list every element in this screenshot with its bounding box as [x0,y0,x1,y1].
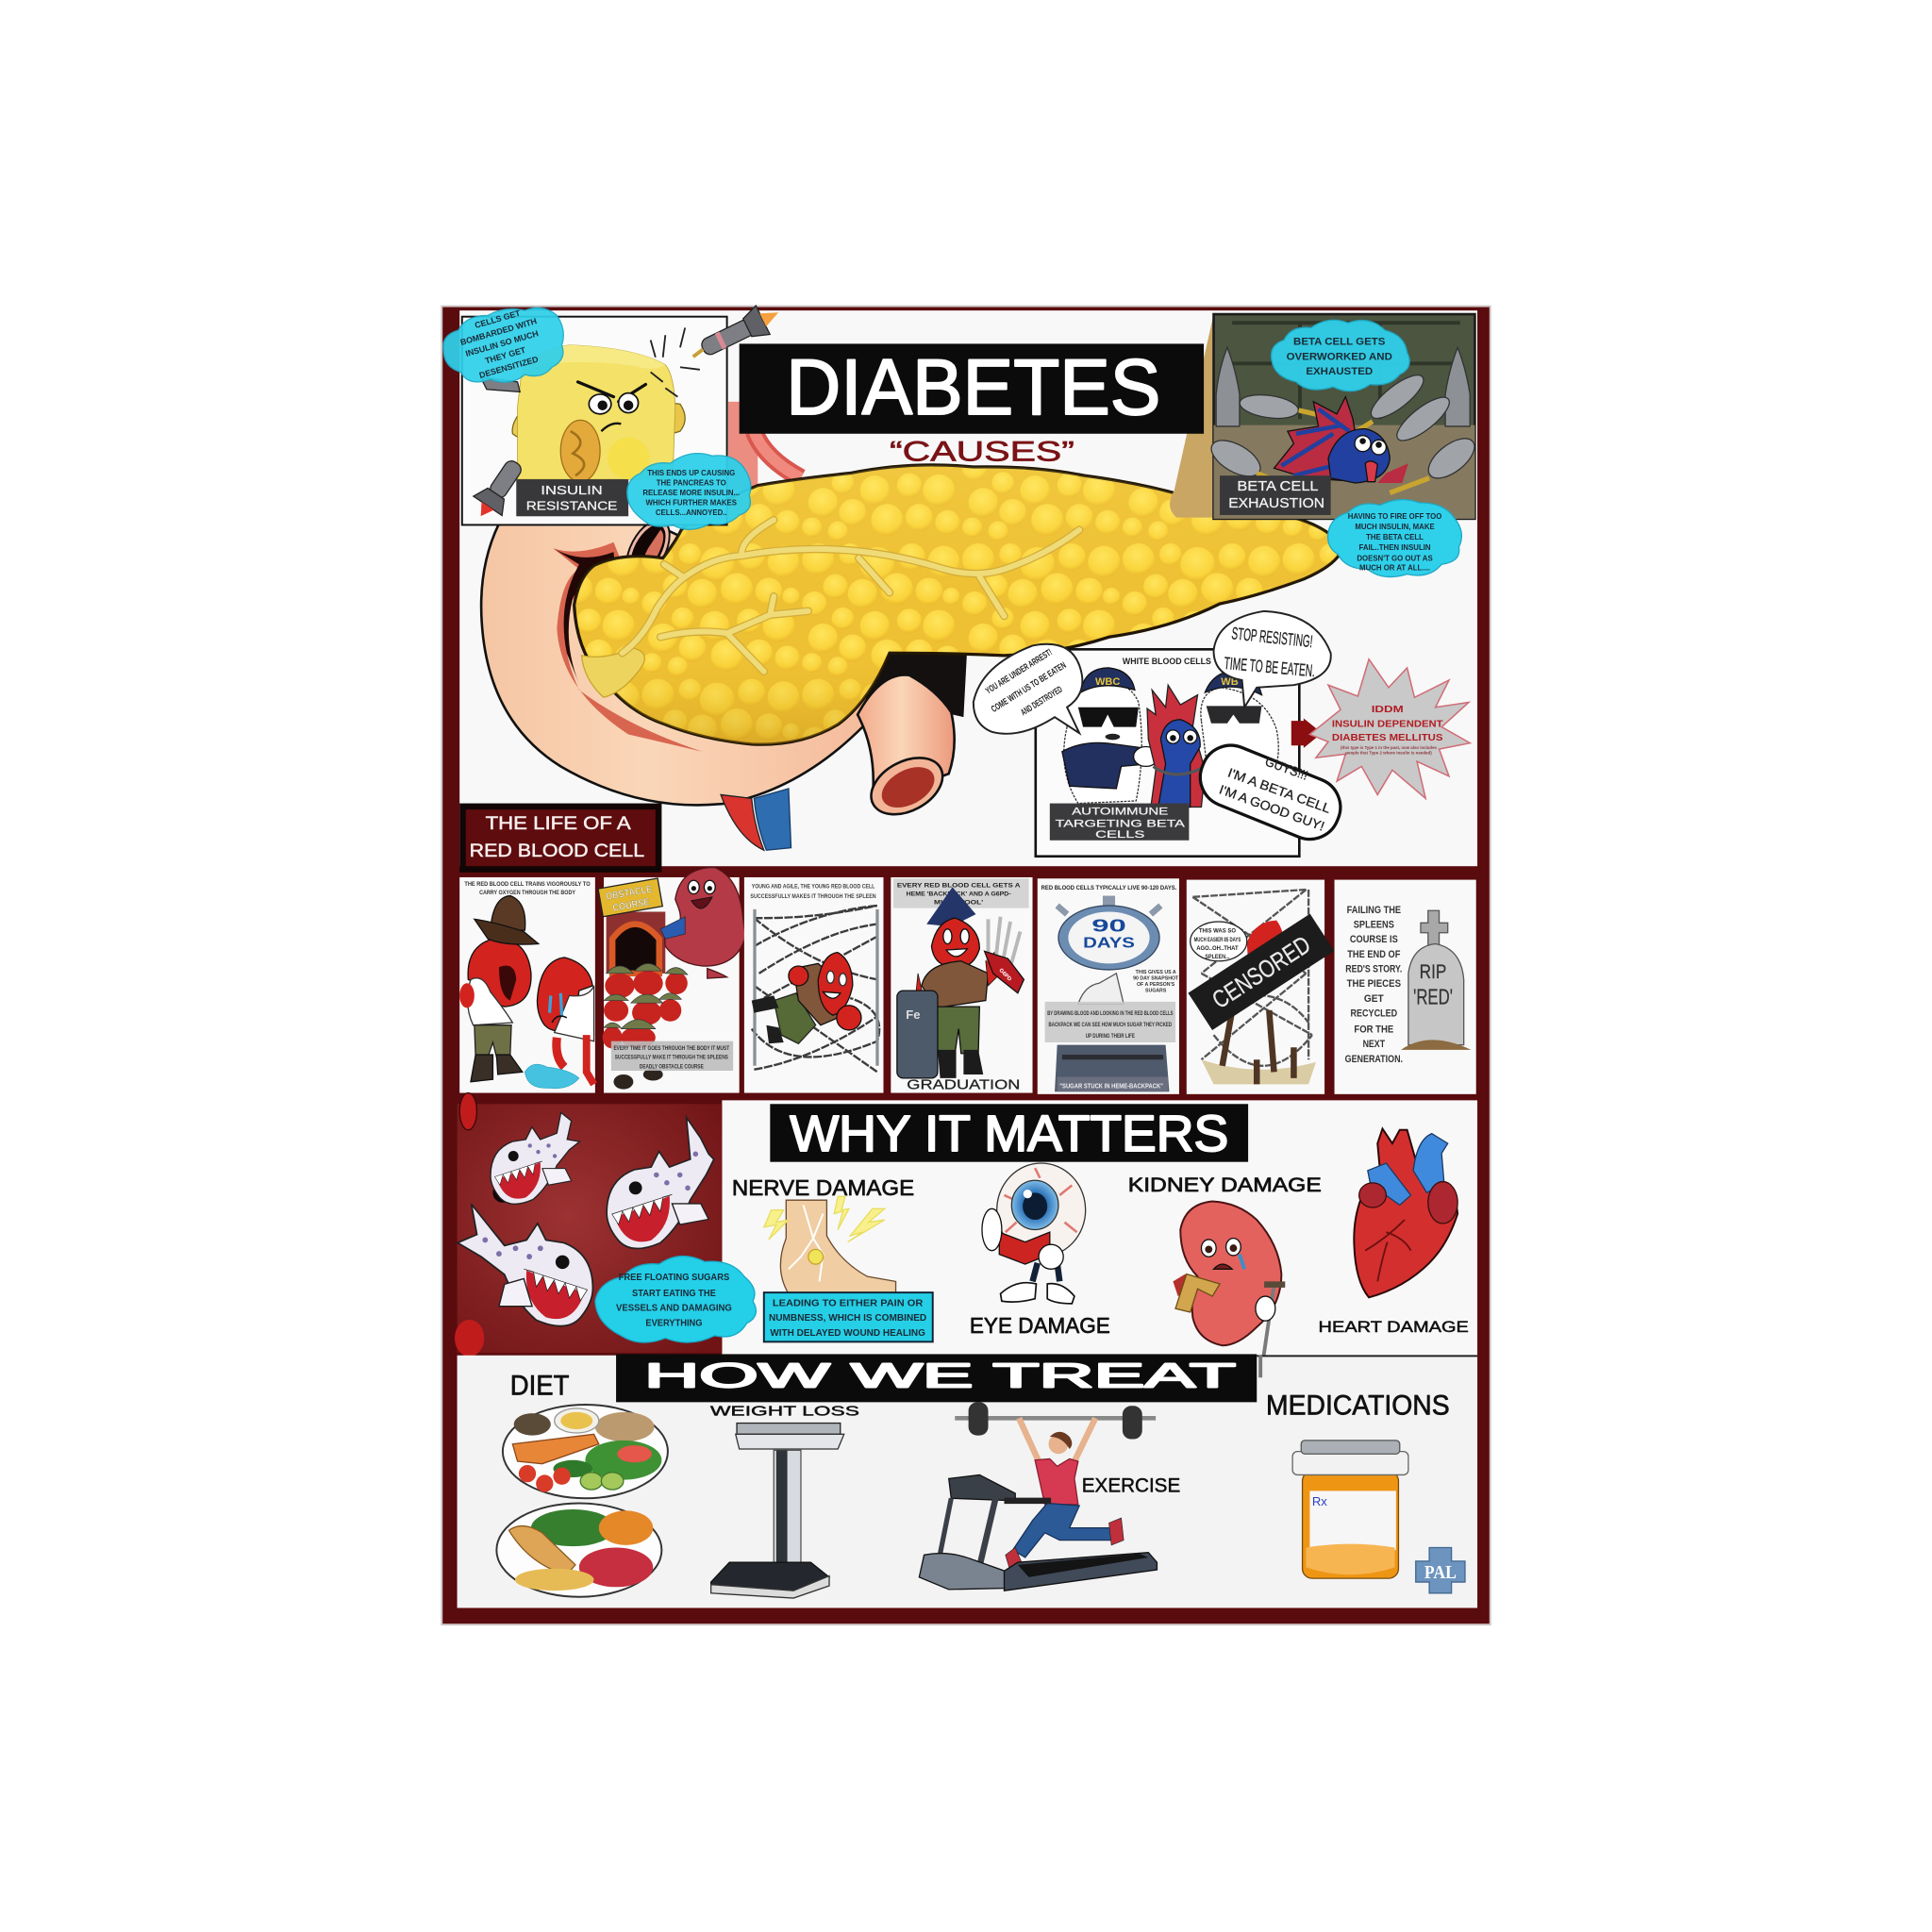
callout: free floating sugars: VESSELS AND DAMAGING [616,1304,732,1314]
callout: pain or numbness: LEADING TO EITHER PAIN OR [773,1298,924,1308]
standing missiles [1216,347,1470,426]
text block: RECYCLED [1351,1008,1397,1020]
note text: SUGARS [1145,988,1167,993]
panel: RBC strip 5 ninety days: RED BLOOD CELLS TYPICALLY LIVE 90-120 DAYS. [1041,885,1176,891]
icon: sugar shark 2 [607,1118,714,1248]
icon: obstacle course sign: COURSE [612,897,650,914]
callout: firing too much insulin: MUCH OR AT ALL.... [1359,564,1430,573]
speech bubble: under arrest [974,644,1082,734]
label: autoimmune: TARGETING BETA [1056,818,1186,829]
speech bubble: SPLEEN... [1205,954,1230,960]
icon: treadmill [919,1474,1157,1591]
icon: yellow cell [512,345,685,482]
text block: NEXT [1363,1039,1385,1050]
icon: crawling red cell [752,953,861,1043]
black hole [492,1183,512,1203]
speech bubble: I'm a beta cell: I'M A GOOD GUY! [1217,782,1326,834]
callout: pancreas releases more insulin: THE PANCREAS TO [657,479,726,488]
callout: free floating sugars: EVERYTHING [645,1318,703,1328]
icon: right white blood cell: WB [1221,676,1239,688]
panel: autoimmune comic: WHITE BLOOD CELLS [1123,657,1211,666]
callout: cells desensitized: DESENSITIZED [478,354,540,380]
tube with opening [858,675,955,825]
icon: plate one [503,1405,668,1498]
pale head of duct [581,648,644,697]
speech bubble: AGO..OH..THAT [1196,945,1239,952]
callout: pain or numbness [764,1292,933,1341]
callout: cells desensitized: BOMBARDED WITH [459,316,538,347]
panel: RBC strip 3 barbed wire: SUCCESSFULLY MAKES IT THROUGH THE SPLEEN [750,893,876,900]
speech bubble: I'm a beta cell [1191,737,1349,848]
panel: RBC strip 5 ninety days [1038,878,1179,1094]
icon: weighing scale [711,1424,844,1598]
callout: cells desensitized: CELLS GET [474,308,522,330]
note box [611,1041,733,1071]
label: autoimmune [1050,804,1189,841]
speech bubble: THIS WAS SO [1199,928,1236,935]
icon: missile lower left [467,454,531,525]
note text: OF A PERSON'S [1137,982,1175,988]
text block [1345,905,1403,1065]
icon: sugar shark [1078,974,1124,1004]
icon: stopwatch: 90 [1091,915,1126,935]
label: nerve damage: NERVE DAMAGE [732,1175,914,1200]
panel: RBC strip 1 drill sergeant: CARRY OXYGEN THROUGH THE BODY [479,890,576,896]
icon: stopwatch [1058,896,1160,970]
icon: tombstone: 'RED' [1413,984,1453,1008]
label: exercise: EXERCISE [1082,1475,1180,1497]
logo: PAL: PAL [1424,1563,1457,1583]
speech bubble: stop resisting: TIME TO BE EATEN. [1224,653,1316,680]
label: diet: DIET [510,1371,569,1402]
text block: COURSE IS [1350,934,1398,945]
callout: firing too much insulin [1328,500,1461,577]
panel: RBC strip 1 drill sergeant: THE RED BLOOD CELL TRAINS VIGOROUSLY TO [464,881,591,888]
angry face [578,382,645,402]
label: beta cell exhaustion: EXHAUSTION [1228,496,1324,511]
callout: firing too much insulin: HAVING TO FIRE OFF TOO [1348,512,1441,521]
duodenum [481,518,899,805]
heading: life of a red blood cell [459,804,661,873]
logo: PAL [1416,1547,1465,1593]
label: kidney damage: KIDNEY DAMAGE [1128,1174,1322,1196]
icon: red cell hidden [1247,921,1284,986]
icon: sugar shark 3 [458,1204,592,1326]
text block: SPLEENS [1354,920,1394,931]
heading: life of a red blood cell: RED BLOOD CELL [470,841,644,861]
label: beta cell exhaustion: BETA CELL [1237,479,1319,494]
callout: pain or numbness: WITH DELAYED WOUND HEALING [770,1328,925,1339]
speech bubble: stop resisting: STOP RESISTING! [1231,623,1314,651]
text block: FOR THE [1354,1024,1393,1036]
heading: why it matters: WHY IT MATTERS [790,1107,1228,1162]
callout: pancreas releases more insulin: WHICH FURTHER MAKES [645,499,737,508]
panel: why it matters [455,1093,1477,1377]
callout: cells desensitized: INSULIN SO MUCH [464,328,540,358]
icon: iron backpack: Fe [906,1008,920,1022]
speech bubble: I'm a beta cell: GUYS!!! [1263,755,1309,783]
callout: free floating sugars: FREE FLOATING SUGARS [619,1273,729,1283]
panel: RBC strip 2 obstacle course [598,868,745,1093]
red artery behind title [728,402,801,491]
label: medications: MEDICATIONS [1266,1390,1450,1421]
panel: RBC strip 4 graduation: EVERY RED BLOOD CELL GETS A [897,882,1021,889]
heading: life of a red blood cell: THE LIFE OF A [486,813,632,834]
panel: how we treat [458,1354,1477,1607]
icon: legs and bottles [1223,1010,1293,1084]
icon: missile upper right [685,298,786,369]
icon: woman running [1006,1418,1124,1579]
panel: RBC strip 4 graduation: HEME 'BACKPACK' AND A G6PD- [907,891,1011,898]
icon: soldier cells [603,963,688,1090]
icon: right white blood cell [1201,671,1278,772]
icon: backpack with sugar [1055,1045,1170,1091]
text block: GET [1364,993,1384,1005]
fallen missiles [1206,368,1481,486]
icon: handcuffed beta fish [1147,685,1210,808]
icon: left white blood cell [1062,668,1158,804]
callout: beta cell overworked: OVERWORKED AND [1287,351,1392,362]
impact marks [651,327,700,397]
icon: exhausted beta fish [1274,397,1408,483]
label: heart damage: HEART DAMAGE [1319,1318,1469,1336]
icon: missile upper left [480,377,520,391]
label: eye damage: EYE DAMAGE [970,1313,1110,1338]
vessels under pancreas [721,789,791,850]
starburst: IDDM [1309,659,1470,798]
icon: foot with nerve pain [764,1196,896,1293]
icon: arch tunnel [607,912,665,974]
icon: pill bottle [1292,1441,1408,1578]
callout: pain or numbness: NUMBNESS, WHICH IS COMBINED [769,1313,927,1324]
icon: left white blood cell: WBC [1095,676,1120,688]
icon: iron backpack [897,991,938,1078]
callout: cells desensitized [443,305,563,383]
panel: RBC strip 6 censored [1187,880,1334,1094]
speech bubble: under arrest: COME WITH US TO BE EATEN [990,660,1068,715]
icon: backpack with sugar: "SUGAR STUCK IN HEME-BACKPACK" [1059,1081,1163,1090]
icon: sugar shark 1 [491,1112,579,1204]
callout: firing too much insulin: FAIL..THEN INSULIN [1358,543,1431,552]
callout: pancreas releases more insulin [627,454,751,529]
icon: plate two [496,1503,661,1597]
speech bubble [1191,922,1247,961]
icon: sergeant red cell [459,896,539,1082]
label: autoimmune: CELLS [1095,829,1144,841]
speech bubble: under arrest: AND DESTROYED [1019,685,1064,718]
note box: SUCCESSFULLY MAKE IT THROUGH THE SPLEENS [615,1056,728,1061]
note text [1133,970,1179,993]
icon: G6PD multi tool: G6PD [997,968,1012,983]
note text: 90 DAY SNAPSHOT [1133,975,1179,981]
panel: RBC strip 3 barbed wire [744,877,883,1093]
callout: free floating sugars: START EATING THE [632,1289,716,1299]
icon: crying red cell [525,958,594,1089]
info box: UP DURING THEIR LIFE [1086,1034,1135,1040]
panel: RBC strip 4 graduation [891,877,1033,1093]
icon: sad kidney with crutch [1173,1201,1285,1377]
heading: how we treat [616,1354,1257,1402]
starburst: IDDM: (this type is Type 1 in the past, now also includes [1341,745,1438,750]
speech bubble: under arrest: YOU ARE UNDER ARREST! [984,647,1055,696]
note box: DEADLY OBSTACLE COURSE [640,1064,704,1070]
pancreatic duct [623,520,1079,672]
icon: pill bottle: Rx [1312,1494,1327,1508]
icon: obstacle course sign: OBSTACLE [605,884,653,903]
label: insulin resistance: RESISTANCE [526,499,618,513]
icon: spleen character [660,868,745,978]
panel: causes [443,298,1481,866]
text block: GENERATION. [1345,1054,1403,1065]
speech bubble: MUCH EASIER 85 DAYS [1194,937,1241,943]
label: insulin resistance [516,479,628,516]
text block: THE PIECES [1347,978,1401,990]
subtitle: causes: “CAUSES” [890,436,1074,467]
icon: heart [1354,1128,1457,1297]
barbed wire [752,906,879,1072]
label: graduation: GRADUATION [907,1078,1020,1093]
crutch foot [1259,1356,1262,1377]
panel: autoimmune comic [974,611,1349,857]
poster frame [441,307,1491,1624]
pancreas [575,465,1343,744]
panel: RBC strip 3 barbed wire: YOUNG AND AGILE, THE YOUNG RED BLOOD CELL [752,884,874,891]
callout: firing too much insulin: DOESN'T GO OUT AS [1357,554,1433,562]
icon: tombstone [1401,910,1472,1050]
speech bubble: I'm a beta cell: I'M A BETA CELL [1225,766,1333,816]
label: insulin resistance: INSULIN [541,483,603,497]
dark shadow under pancreas [862,647,967,717]
note box: EVERY TIME IT GOES THROUGH THE BODY IT MUST [613,1046,729,1052]
text block: THE END OF [1347,949,1401,960]
info box [1045,1002,1175,1042]
arrow: to IDDM [1291,718,1322,748]
panel: beta cell exhaustion comic [1206,314,1481,519]
starburst: IDDM: IDDM [1372,705,1404,715]
callout: firing too much insulin: MUCH INSULIN, MAKE [1355,523,1435,531]
text block: FAILING THE [1347,905,1401,916]
callout: beta cell overworked: EXHAUSTED [1306,366,1373,377]
panel: RBC strip 7 RIP [1335,880,1476,1094]
starburst: IDDM: INSULIN DEPENDENT [1332,720,1443,730]
icon: obstacle course sign [598,878,662,917]
icon: eyeball reading [982,1163,1086,1304]
label: weight loss: WEIGHT LOSS [710,1404,859,1420]
info box: BY DRAWING BLOOD AND LOOKING IN THE RED BLOOD CELLS [1047,1011,1173,1017]
duodenum opening [618,513,678,586]
icon: stopwatch: DAYS [1083,935,1135,951]
callout: firing too much insulin: THE BETA CELL [1366,533,1424,541]
info box: BACKPACK WE CAN SEE HOW MUCH SUGAR THEY PICKED [1049,1023,1173,1028]
icon: G6PD multi tool [985,917,1024,993]
panel: RBC strip 4 graduation: MULTI TOOL' [934,900,984,907]
callout: beta cell overworked [1272,320,1409,391]
icon: barbell [955,1402,1156,1440]
callout: cells desensitized: THEY GET [484,345,527,366]
label: autoimmune: AUTOIMMUNE [1072,806,1168,817]
starburst: IDDM: DIABETES MELLITUS [1332,733,1443,743]
callout: beta cell overworked: BETA CELL GETS [1293,337,1386,348]
panel: red vessel with sugar sharks [455,1093,756,1357]
callout: free floating sugars [595,1257,756,1342]
callout: pancreas releases more insulin: CELLS...ANNOYED.. [656,508,727,517]
tan triangle connector [1170,314,1214,518]
panel: insulin resistance comic [443,298,786,529]
text block: RED'S STORY. [1345,964,1402,975]
speech bubble: stop resisting [1214,611,1331,708]
callout: pancreas releases more insulin: RELEASE MORE INSULIN... [642,489,740,497]
label: beta cell exhaustion [1220,475,1331,515]
crease around pancreas head [553,542,702,752]
icon: tombstone: RIP [1420,961,1446,983]
callout: pancreas releases more insulin: THIS ENDS UP CAUSING [647,469,735,477]
panel: RBC strip 1 drill sergeant [459,877,595,1093]
heading: how we treat: HOW WE TREAT [644,1357,1236,1395]
barbed wire [1192,890,1312,1066]
starburst: IDDM: people that Type 2 where insulin is needed) [1345,750,1432,755]
icon: graduate red cell [914,887,1001,1078]
title: DIABETES [786,342,1160,431]
censored banner: CENSORED [1207,930,1315,1014]
note text: THIS GIVES US A [1136,970,1176,975]
ground [1201,1059,1316,1084]
